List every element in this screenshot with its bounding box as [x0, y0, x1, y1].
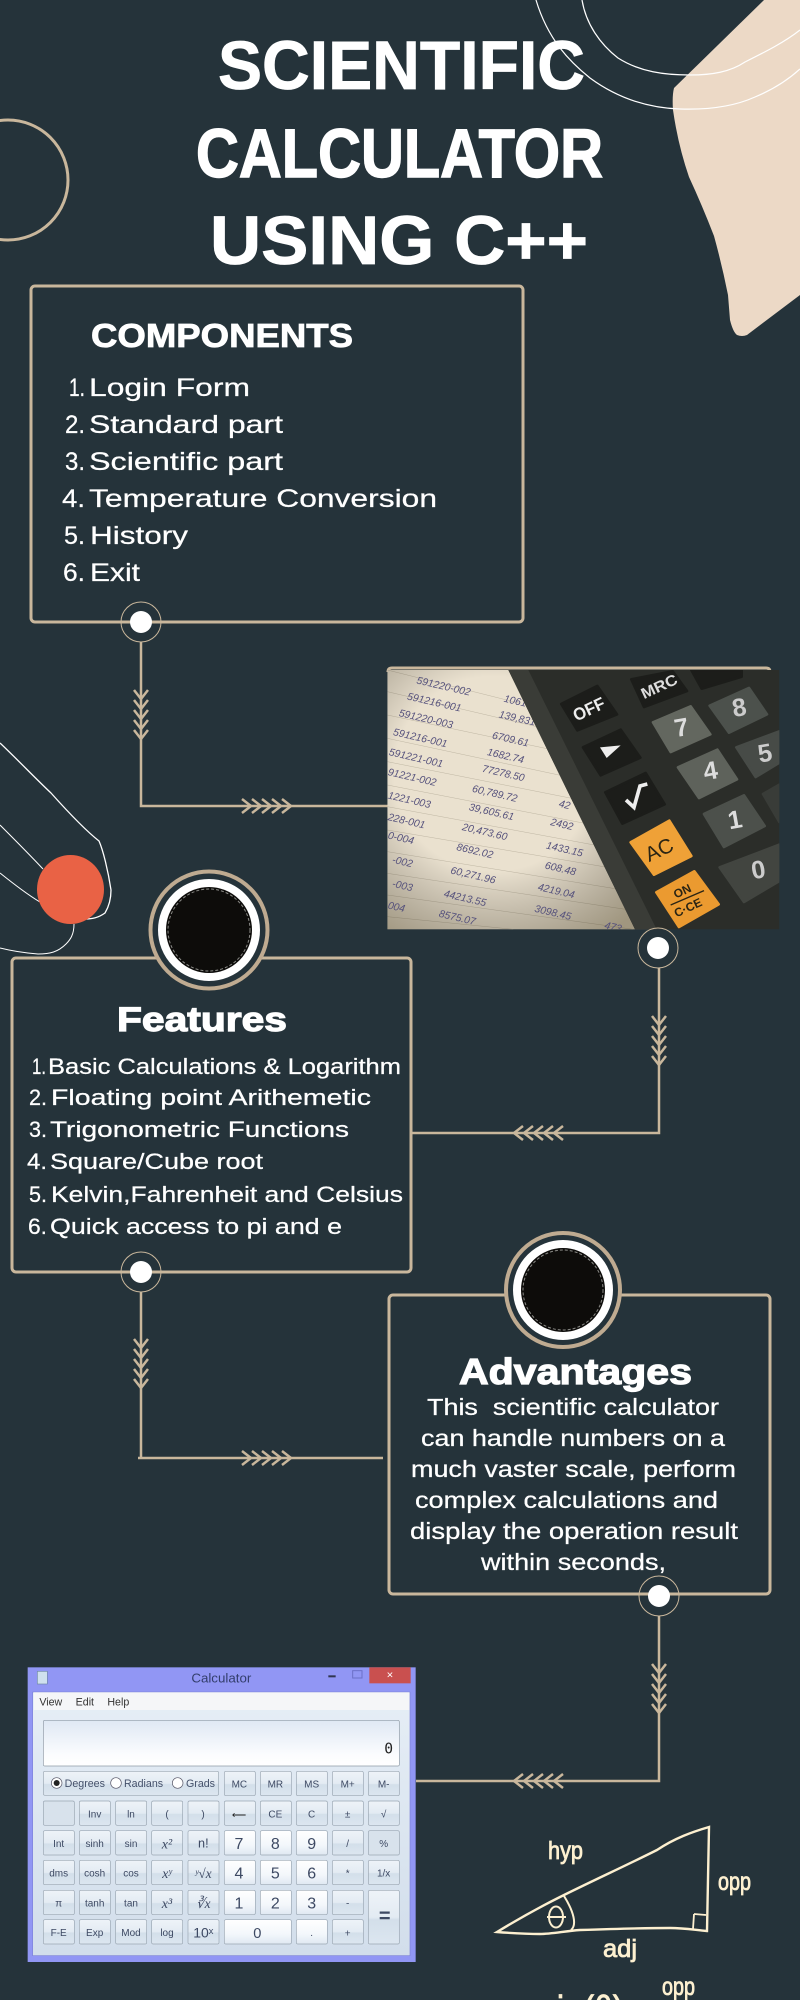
menu bar — [34, 1692, 409, 1710]
key labels: 7 — [235, 1836, 244, 1853]
handwritten figures: 60,789.72 — [471, 784, 518, 805]
key labels: C·CE — [672, 895, 704, 920]
key labels: n! — [198, 1837, 209, 1851]
key labels: . — [310, 1928, 313, 1939]
key labels: % — [379, 1839, 388, 1850]
key labels: F-E — [51, 1928, 67, 1939]
key labels: cos — [123, 1869, 139, 1880]
key labels: ∛x — [196, 1895, 211, 1911]
key labels: 4 — [235, 1866, 244, 1883]
list: features: 4. — [27, 1149, 47, 1174]
handwritten figures: 1221-003 — [387, 791, 432, 811]
list: components: 6. — [63, 559, 85, 587]
key labels: 1 — [235, 1896, 244, 1913]
menu bar: Edit — [76, 1696, 94, 1708]
handwritten figures: 20,473.60 — [460, 822, 508, 843]
key labels: 4 — [701, 756, 720, 786]
key labels: 1 — [726, 805, 744, 835]
key labels: 0 — [749, 855, 768, 885]
decoration: white curved lines — [536, 0, 800, 109]
handwritten figures: 591216-001 — [406, 692, 462, 715]
key labels: ± — [345, 1809, 351, 1820]
key labels: Exp — [86, 1928, 104, 1939]
calculator body — [33, 1692, 410, 1956]
title: SCIENTIFIC — [218, 27, 585, 104]
label: opp: opp — [718, 1868, 751, 1896]
display: 0 — [384, 1740, 393, 1757]
list: features: Quick access to pi and e — [50, 1214, 342, 1239]
key labels: x³ — [161, 1897, 173, 1912]
handwritten figures: 1433.15 — [545, 841, 584, 860]
decoration: peach blob — [673, 0, 800, 336]
handwritten figures: 228-001 — [386, 812, 426, 831]
key labels: + — [345, 1929, 351, 1940]
list: features: 2. — [29, 1085, 47, 1110]
handwritten figures: 1682.74 — [486, 747, 525, 766]
title bar: Calculator — [191, 1671, 252, 1686]
key labels: - — [346, 1899, 349, 1910]
key labels: π — [55, 1899, 62, 1910]
handwritten figures: 591220-002 — [415, 676, 472, 699]
key labels: = — [379, 1906, 390, 1928]
angle mode selector: Degrees — [65, 1778, 105, 1790]
handwritten figures: 8692.02 — [455, 842, 494, 861]
heading: advantages: Advantages — [459, 1351, 692, 1392]
decoration: finger lines and orange blob — [0, 743, 111, 954]
key labels: 9 — [307, 1836, 316, 1853]
paper — [387, 670, 654, 929]
title bar: × — [387, 1670, 393, 1682]
handwritten figures: 39,605.61 — [468, 802, 515, 823]
handwritten figures: 139,831 — [498, 710, 537, 729]
list: features: 3. — [29, 1117, 47, 1142]
list: components: Standard part — [89, 411, 283, 439]
key labels: Inv — [88, 1809, 101, 1820]
photo: calculator on paper — [386, 668, 779, 935]
key labels: ⟵ — [232, 1810, 246, 1821]
key labels: ln — [127, 1809, 135, 1820]
handwritten figures: 4219.04 — [537, 882, 576, 901]
key labels: CE — [268, 1809, 283, 1820]
key labels: 5 — [271, 1866, 280, 1883]
handwritten figures: 591216-001 — [392, 727, 448, 750]
list: features: 5. — [29, 1182, 47, 1207]
title bar — [37, 1667, 411, 1686]
panel: components — [31, 286, 523, 622]
handwritten figures: 608.48 — [544, 861, 577, 878]
key labels: tanh — [85, 1899, 104, 1910]
key labels: AC — [642, 834, 677, 867]
handwritten figures: 91221-002 — [387, 767, 438, 789]
key labels: / — [346, 1839, 349, 1850]
list: features: 6. — [28, 1214, 47, 1239]
angle mode selector: Grads — [186, 1778, 215, 1790]
handwritten figures: 0-004 — [387, 831, 415, 847]
key labels: 10ˣ — [193, 1924, 214, 1940]
list: features — [27, 1054, 403, 1239]
list: components: Scientific part — [89, 448, 283, 476]
key labels: MR — [268, 1780, 283, 1791]
handwritten figures: 1061 — [503, 694, 528, 710]
handwritten figures: -002 — [391, 855, 414, 870]
key labels: √ — [381, 1808, 387, 1820]
dark keys — [561, 670, 779, 927]
key labels: 3 — [307, 1896, 316, 1913]
formula: sin theta — [540, 1973, 695, 2000]
list: components: 2. — [65, 411, 85, 439]
text block: advantages: can handle numbers on a — [421, 1425, 725, 1451]
key labels: x² — [161, 1837, 173, 1852]
key labels: Int — [53, 1839, 64, 1850]
key labels: MC — [232, 1780, 247, 1791]
title: USING C++ — [210, 202, 588, 279]
key labels: 6 — [307, 1866, 316, 1883]
label: hyp: hyp — [548, 1837, 583, 1865]
icon: features medallion — [150, 872, 268, 988]
key labels: 8 — [271, 1836, 280, 1853]
list: components: Temperature Conversion — [89, 485, 437, 513]
calculator body — [508, 670, 779, 929]
menu bar: View — [39, 1696, 63, 1708]
list: features: Square/Cube root — [50, 1149, 263, 1174]
handwritten figures: 60,271.96 — [449, 866, 497, 887]
heading: components: COMPONENTS — [91, 317, 353, 354]
key labels: M+ — [341, 1780, 355, 1791]
connector: components to photo — [121, 602, 388, 813]
key labels: 8 — [730, 693, 749, 723]
keypad — [43, 1771, 399, 1944]
list: components: 1. — [69, 374, 85, 402]
handwritten figures: 8575.07 — [438, 909, 478, 928]
text block: advantages: within seconds, — [480, 1549, 666, 1575]
list: components: Exit — [90, 559, 140, 587]
handwritten figures: -003 — [391, 879, 414, 894]
key labels: 7 — [672, 713, 691, 743]
list: features: Trigonometric Functions — [50, 1117, 349, 1142]
list: components: 5. — [64, 522, 85, 550]
key labels: ON — [671, 881, 693, 901]
key labels: sin — [125, 1839, 137, 1850]
handwritten figures: 44213.55 — [443, 889, 487, 909]
list: features: Kelvin,Fahrenheit and Celsius — [51, 1182, 403, 1207]
list: features: Floating point Arithemetic — [51, 1085, 371, 1110]
handwritten figures: 591220-003 — [398, 708, 454, 731]
key labels: 1/x — [377, 1869, 390, 1880]
decoration: left circle — [0, 120, 68, 240]
list: features: Basic Calculations & Logarithm — [48, 1054, 401, 1079]
title: CALCULATOR — [196, 115, 603, 192]
text block: advantages: much vaster scale, perform — [411, 1456, 736, 1482]
handwritten figures: 591221-001 — [388, 747, 444, 770]
key labels: OFF — [570, 693, 608, 725]
text block: advantages: complex calculations and — [415, 1487, 718, 1513]
key labels: ʸ√x — [194, 1866, 212, 1881]
key labels: sinh — [86, 1839, 104, 1850]
connector: advantages to calculator — [416, 1576, 679, 1788]
key labels: 0 — [253, 1926, 261, 1942]
key labels: dms — [49, 1869, 68, 1880]
text block: advantages: This scientific calculator — [427, 1394, 719, 1420]
key labels: C — [308, 1809, 315, 1820]
key labels: 5 — [756, 739, 774, 769]
key labels: cosh — [84, 1869, 105, 1880]
label: theta — [547, 1906, 566, 1928]
key labels — [49, 1780, 390, 1942]
key labels — [570, 671, 774, 920]
list: features: 1. — [32, 1054, 46, 1079]
key labels: * — [346, 1869, 350, 1880]
label: adj: adj — [603, 1935, 637, 1963]
key labels: log — [160, 1928, 174, 1939]
grey keys — [653, 706, 710, 752]
key labels: ) — [201, 1809, 205, 1820]
list: components: History — [90, 522, 189, 550]
handwritten figures: 77278.50 — [481, 764, 526, 784]
connector: features to advantages — [121, 1252, 383, 1465]
handwritten figures: 004 — [387, 901, 406, 915]
panel: advantages — [389, 1233, 770, 1594]
handwritten figures: 42 — [558, 799, 572, 812]
icon: advantages medallion — [506, 1233, 620, 1347]
key labels: xʸ — [161, 1867, 173, 1882]
handwritten figures — [386, 676, 623, 935]
list: components: Login Form — [89, 374, 250, 402]
key labels: tan — [124, 1899, 138, 1910]
menu bar: Help — [107, 1696, 129, 1708]
orange keys — [631, 821, 691, 875]
angle mode selector — [43, 1771, 219, 1795]
heading: features: Features — [117, 1001, 287, 1039]
diagram: right triangle — [497, 1827, 751, 2000]
display — [43, 1720, 399, 1766]
text block: advantages: display the operation result — [410, 1518, 739, 1544]
list: components: 3. — [65, 448, 85, 476]
handwritten figures: 473 — [603, 921, 623, 935]
list: components: 4. — [62, 485, 85, 513]
key labels: MS — [304, 1780, 319, 1791]
list: components — [62, 374, 437, 587]
title — [196, 27, 603, 279]
key labels: ( — [165, 1809, 169, 1820]
text block: advantages — [410, 1394, 739, 1575]
connector: photo to features — [412, 928, 678, 1140]
handwritten figures: 2492 — [548, 817, 574, 833]
key labels: 2 — [271, 1896, 280, 1913]
key labels: MRC — [639, 671, 681, 703]
handwritten figures: 6709.61 — [491, 731, 530, 750]
key labels: M- — [378, 1780, 389, 1791]
handwritten figures: 3098.45 — [533, 904, 572, 923]
panel: features — [12, 872, 411, 1272]
angle mode selector: Radians — [124, 1778, 163, 1790]
key labels: Mod — [121, 1928, 141, 1939]
calculator window screenshot — [28, 1667, 416, 1962]
